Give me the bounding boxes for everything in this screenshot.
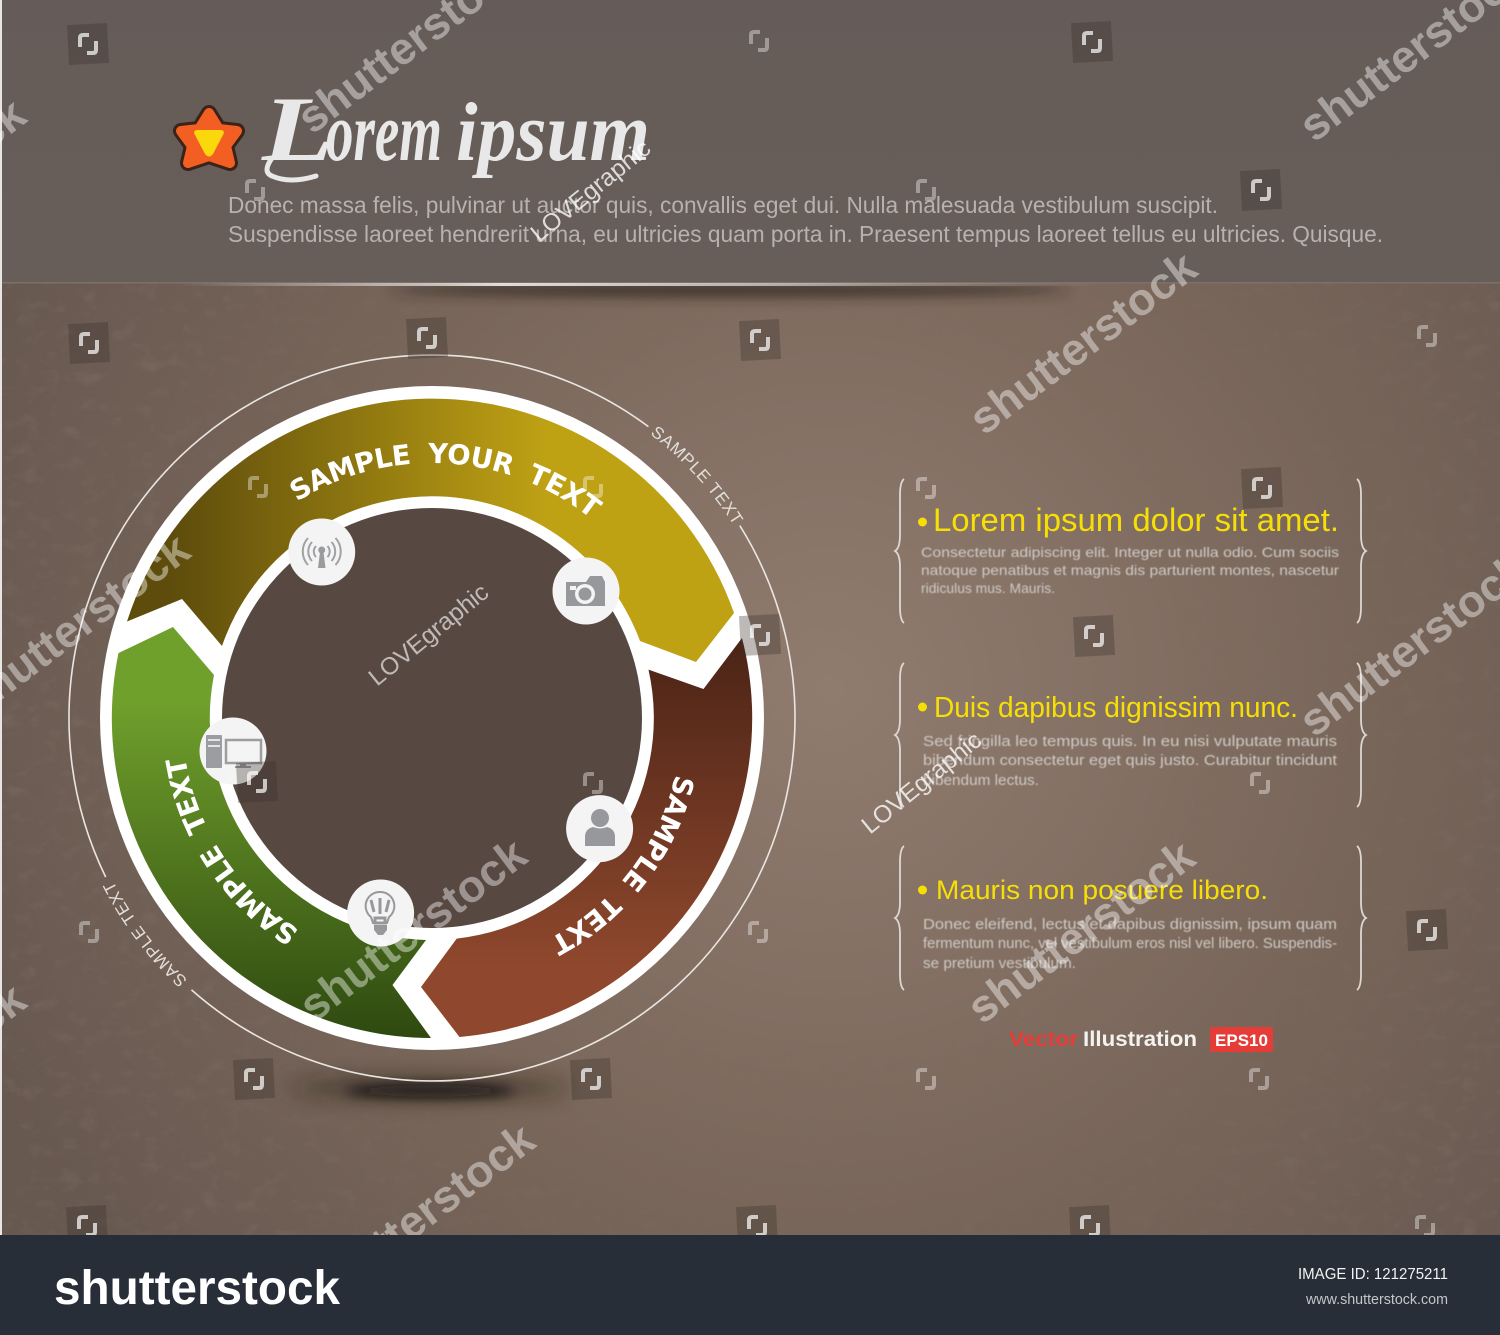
- watermark words: shutterstock: [958, 829, 1205, 1033]
- grunge texture: [4, 376, 1468, 1230]
- brace left: [895, 846, 904, 990]
- header band: [2, 0, 1500, 297]
- body text: se pretium vestibulum.: [923, 955, 1076, 972]
- segment: yellow: [127, 399, 734, 662]
- title: [261, 78, 650, 180]
- body text: fermentum nunc, vel vestibulum eros nisl vel libero. Suspendis-: [923, 935, 1337, 952]
- ring label upper right: SAMPLE TEXT: [652, 426, 744, 522]
- body text: Sed fringilla leo tempus quis. In eu nisi vulputate mauris: [923, 733, 1337, 750]
- footer logo: shutterstock: [54, 1262, 340, 1315]
- body text: [921, 544, 1339, 596]
- icon: camera: [552, 558, 620, 624]
- segment label: brown: SAMPLE TEXT: [555, 776, 694, 956]
- body text: [923, 916, 1337, 972]
- cycle diagram: [68, 354, 796, 1082]
- body text: ridiculus mus. Mauris.: [921, 580, 1055, 596]
- intro text: [228, 192, 1383, 247]
- heading: Duis dapibus dignissim nunc.: [934, 692, 1298, 724]
- watermark words: LOVEgraphic: [364, 579, 494, 692]
- icon: person: [566, 795, 633, 862]
- inner dark disc: [222, 508, 642, 928]
- info block 1: [895, 479, 1366, 623]
- outer thin ring: [69, 355, 795, 1081]
- vector illustration badge: Illustration: [1083, 1028, 1197, 1051]
- brace right: [1357, 479, 1366, 623]
- vector illustration badge: Vector: [1009, 1028, 1078, 1051]
- segment: green: [112, 627, 431, 1038]
- watermark words: shutterstock: [298, 1112, 545, 1316]
- body text: bibendum consectetur eget quis justo. Curabitur tincidunt: [923, 752, 1338, 769]
- brace left: [895, 663, 904, 807]
- image id: IMAGE ID: 121275211: [1298, 1266, 1448, 1283]
- left edge highlight: [0, 0, 2, 1235]
- heading: Lorem ipsum dolor sit amet.: [933, 502, 1339, 538]
- bullet: [918, 886, 927, 894]
- icon: wifi: [288, 518, 355, 586]
- intro text: Donec massa felis, pulvinar ut auctor quis, convallis eget dui. Nulla malesuada vestibulum suscipit.: [228, 192, 1218, 218]
- body text: Donec eleifend, lectus et dapibus dignissim, ipsum quam: [923, 916, 1337, 933]
- segment: brown: [421, 638, 752, 1037]
- brace right: [1357, 846, 1366, 990]
- icon: star logo: [181, 113, 237, 163]
- bullet: [918, 518, 927, 526]
- intro text: Suspendisse laoreet hendrerit urna, eu ultricies quam porta in. Praesent tempus laoreet tellus eu ultricies. Quisque.: [228, 221, 1383, 247]
- body text: [923, 733, 1338, 789]
- brace left: [895, 479, 904, 623]
- info block 2: [895, 663, 1366, 807]
- watermark words: shutterstock: [290, 827, 537, 1031]
- info block 3: [895, 846, 1366, 990]
- vector illustration badge: [1009, 1027, 1273, 1052]
- brace right: [1357, 663, 1366, 807]
- watermark words: LOVEgraphic: [857, 727, 987, 840]
- segment label: green: SAMPLE TEXT: [165, 760, 298, 944]
- white disc: [100, 386, 764, 1050]
- bullet: [918, 702, 927, 712]
- segment label: yellow: SAMPLE YOUR TEXT: [290, 442, 604, 515]
- ring label lower left: SAMPLE TEXT: [102, 884, 186, 986]
- vector illustration badge: EPS10: [1215, 1031, 1268, 1050]
- title: ipsum: [456, 86, 650, 179]
- heading: Mauris non posuere libero.: [936, 875, 1268, 905]
- icon: computer: [200, 718, 266, 784]
- icon: light bulb: [347, 880, 414, 946]
- ground shadow: [290, 1078, 570, 1098]
- footer bar: [0, 1235, 1500, 1335]
- body text: Consectetur adipiscing elit. Integer ut nulla odio. Cum sociis: [921, 544, 1339, 560]
- title: L: [261, 78, 334, 180]
- watermark words: LOVEgraphic: [526, 135, 656, 248]
- footer url: www.shutterstock.com: [1305, 1292, 1448, 1308]
- body text: natoque penatibus et magnis dis parturient montes, nascetur: [921, 562, 1339, 578]
- body text: bibendum lectus.: [923, 772, 1039, 789]
- title: orem: [326, 86, 442, 179]
- watermark words: shutterstock: [960, 240, 1207, 444]
